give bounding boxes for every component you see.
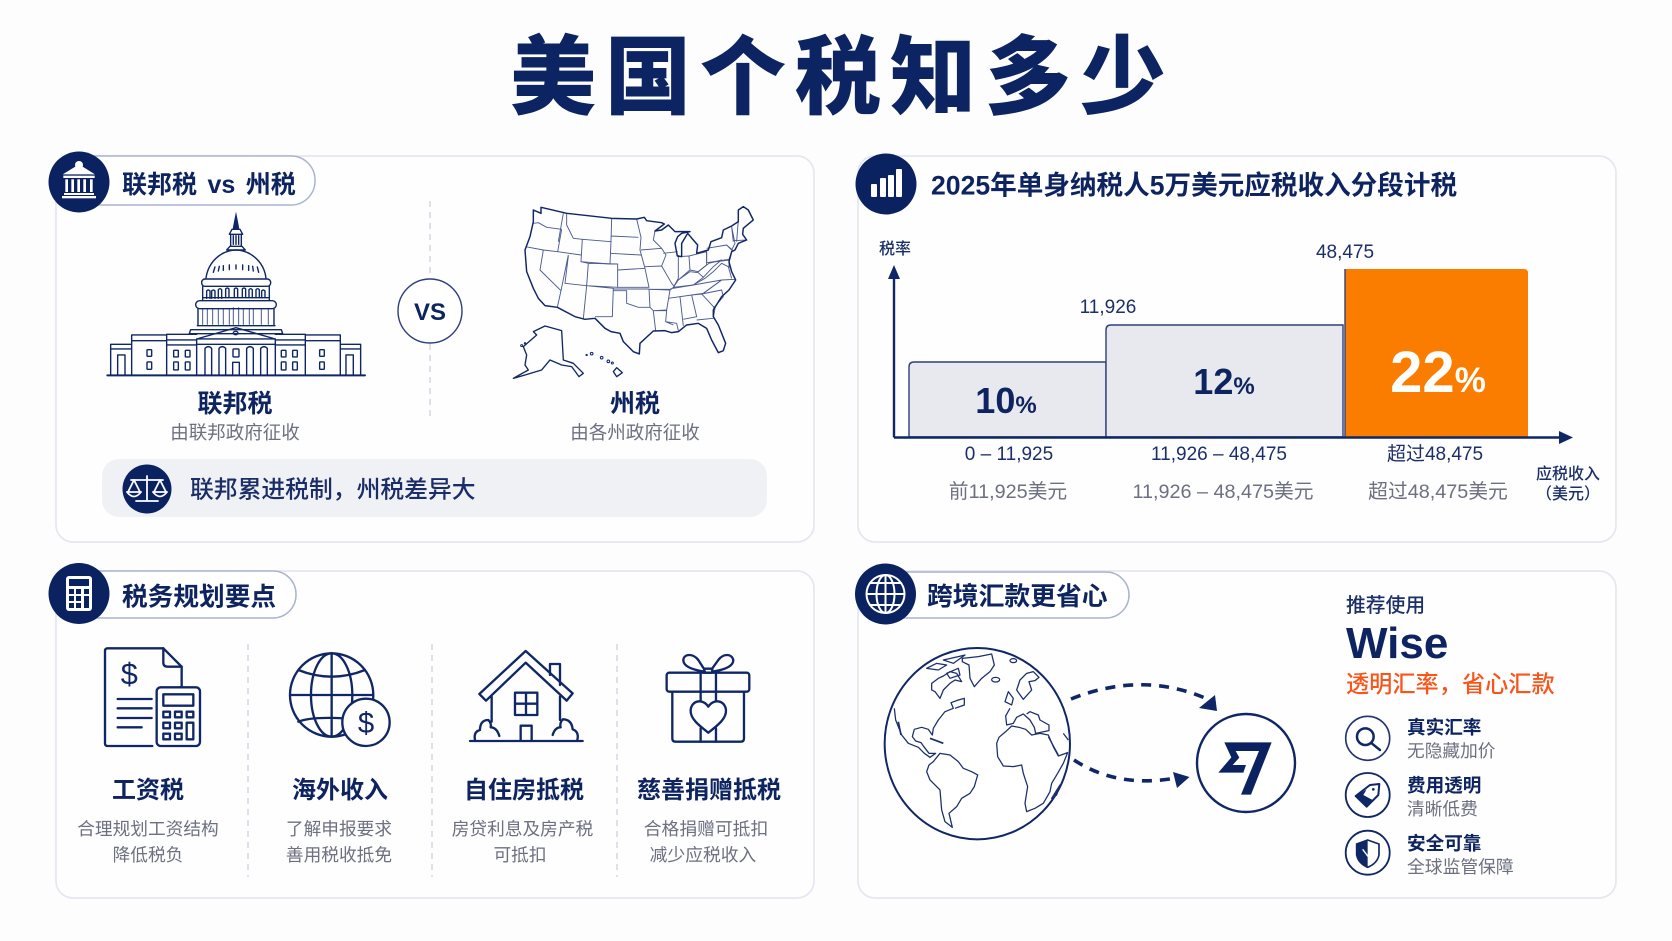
text: home description: 可抵扣 bbox=[493, 845, 547, 865]
text: home description bbox=[452, 819, 594, 865]
text: payroll description bbox=[77, 819, 219, 865]
panel: federal vs state tax bbox=[48, 152, 814, 542]
feature: safe and reliable bbox=[1346, 831, 1514, 877]
feature: transparent fees: 费用透明 bbox=[1407, 775, 1481, 796]
icon: world globe bbox=[885, 648, 1070, 839]
panel: cross-border remittance bbox=[855, 564, 1616, 898]
title: 美国个税知多少 bbox=[510, 30, 1175, 126]
bracket range labels: 超过48,475 bbox=[1387, 443, 1483, 465]
text: Wise tagline: 透明汇率，省心汇款 bbox=[1346, 671, 1555, 697]
heading: tax planning bbox=[48, 563, 296, 624]
label: state tax: 州税 bbox=[610, 390, 660, 418]
label: charity deduction: 慈善捐赠抵税 bbox=[637, 777, 781, 804]
label: home deduction: 自住房抵税 bbox=[464, 777, 584, 804]
feature: safe and reliable: 全球监管保障 bbox=[1407, 857, 1514, 877]
text: recommended: 推荐使用 bbox=[1346, 595, 1425, 617]
text: payroll description: 合理规划工资结构 bbox=[77, 819, 219, 839]
bracket descriptions: 前11,925美元 bbox=[949, 481, 1067, 503]
bar chart: tax rate bbox=[879, 240, 1600, 503]
icon: globe and coin bbox=[290, 653, 390, 746]
x axis label: 应税收入 bbox=[1536, 464, 1600, 483]
bracket range labels: 0 – 11,925 bbox=[965, 444, 1053, 465]
panel: tax planning bbox=[48, 563, 814, 898]
bar: 12 percent: 12% bbox=[1193, 361, 1255, 402]
bracket range labels: 11,926 – 48,475 bbox=[1151, 444, 1287, 465]
callout: progressive federal tax: 联邦累进税制，州税差异大 bbox=[190, 476, 476, 504]
item: payroll tax bbox=[77, 648, 219, 865]
heading: 2025 brackets: 2025年单身纳税人5万美元应税收入分段计税 bbox=[931, 170, 1457, 200]
label: federal tax: 联邦税 bbox=[197, 390, 273, 418]
feature: real exchange rate: 真实汇率 bbox=[1407, 717, 1481, 738]
arrow: globe to Wise (bottom) bbox=[1074, 760, 1190, 788]
text: overseas description: 善用税收抵免 bbox=[286, 845, 392, 865]
text: home description: 房贷利息及房产税 bbox=[452, 819, 594, 839]
icon: gift with heart bbox=[667, 655, 749, 742]
text: charity description: 合格捐赠可抵扣 bbox=[644, 819, 768, 839]
icon: Wise logo bbox=[1197, 714, 1295, 812]
icon: document and calculator: $ bbox=[121, 657, 138, 691]
text: federal description: 由联邦政府征收 bbox=[170, 422, 300, 443]
feature: transparent fees bbox=[1346, 773, 1481, 819]
heading: remittance: 跨境汇款更省心 bbox=[927, 582, 1108, 611]
icon: capitol building bbox=[107, 212, 365, 375]
bracket descriptions: 11,926 – 48,475美元 bbox=[1132, 481, 1314, 503]
callout: progressive federal tax bbox=[102, 459, 767, 517]
x axis label bbox=[1536, 464, 1600, 503]
item: overseas income bbox=[286, 653, 392, 865]
icon: house bbox=[470, 651, 583, 741]
x axis label: （美元） bbox=[1536, 485, 1600, 503]
text: charity description bbox=[644, 819, 768, 865]
text: overseas description bbox=[286, 819, 392, 865]
heading: federal vs state: 联邦税 vs 州税 bbox=[122, 171, 296, 199]
bar: 22 percent bbox=[1345, 269, 1528, 437]
threshold labels: 48,475 bbox=[1316, 242, 1374, 263]
bracket descriptions: 超过48,475美元 bbox=[1368, 481, 1508, 503]
panel: 2025 bracket chart bbox=[856, 154, 1616, 542]
bar: 22 percent: 22% bbox=[1390, 340, 1486, 405]
label: payroll tax: 工资税 bbox=[112, 777, 184, 804]
text: charity description: 减少应税收入 bbox=[650, 845, 757, 865]
item: home deduction bbox=[452, 651, 594, 865]
heading: federal vs state bbox=[48, 152, 315, 212]
item: charity deduction bbox=[637, 655, 781, 865]
vs divider: VS bbox=[414, 299, 446, 326]
text: Wise brand: Wise bbox=[1346, 619, 1448, 668]
feature: safe and reliable: 安全可靠 bbox=[1407, 833, 1481, 854]
text: payroll description: 降低税负 bbox=[113, 845, 183, 865]
bracket descriptions bbox=[949, 481, 1508, 503]
arrow: globe to Wise (top) bbox=[1071, 685, 1217, 711]
feature: real exchange rate bbox=[1346, 716, 1496, 761]
label: overseas income: 海外收入 bbox=[292, 777, 388, 804]
bar: 12 percent bbox=[1106, 325, 1343, 437]
text: overseas description: 了解申报要求 bbox=[286, 819, 392, 839]
heading: remittance bbox=[855, 564, 1129, 624]
text: state description: 由各州政府征收 bbox=[570, 422, 700, 443]
threshold labels bbox=[1080, 242, 1374, 318]
feature: real exchange rate: 无隐藏加价 bbox=[1407, 741, 1496, 761]
feature: transparent fees: 清晰低费 bbox=[1407, 799, 1478, 819]
icon: document and calculator bbox=[105, 648, 200, 746]
bar: 10 percent: 10% bbox=[975, 380, 1037, 421]
bracket range labels bbox=[965, 443, 1483, 465]
icon: globe and coin: $ bbox=[358, 707, 374, 740]
bar: 10 percent bbox=[909, 362, 1106, 437]
y axis label: 税率 bbox=[879, 240, 911, 258]
threshold labels: 11,926 bbox=[1080, 297, 1136, 318]
vs divider bbox=[398, 201, 462, 416]
axes bbox=[888, 265, 1573, 444]
icon: US map bbox=[513, 207, 753, 378]
heading: 2025 brackets bbox=[856, 154, 1457, 214]
heading: tax planning: 税务规划要点 bbox=[122, 582, 276, 612]
